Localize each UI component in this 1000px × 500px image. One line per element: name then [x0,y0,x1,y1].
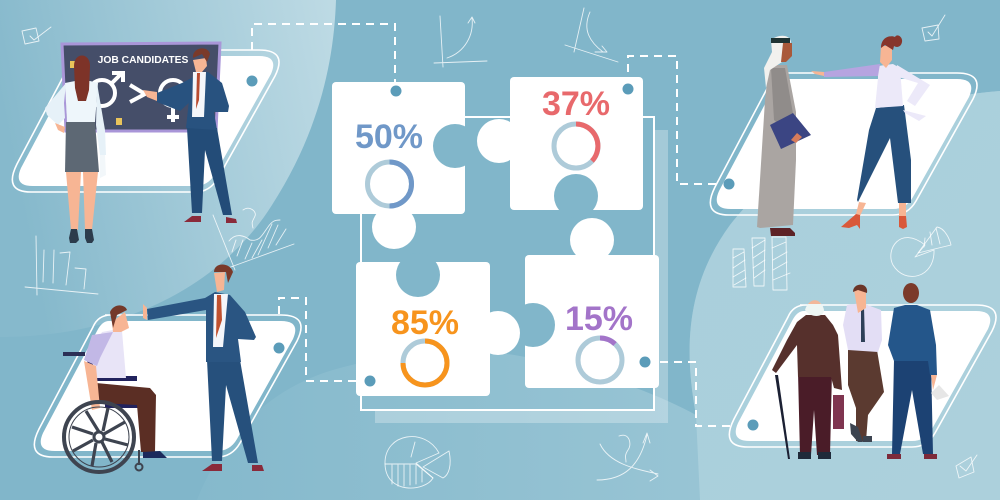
icon: area chart [213,208,294,270]
person: woman from behind [45,56,106,243]
icon: check bottom right [956,455,977,478]
hair [881,35,902,50]
icon: bar chart left [25,236,98,295]
dashed connectors [252,24,732,426]
donut [403,341,447,385]
icon: checkbox top left [22,27,51,44]
percentage: 85% [391,304,459,342]
percentage: 15% [565,300,633,338]
hair [193,48,210,62]
icon: decline curve [565,8,618,62]
hair [903,283,919,303]
panel: top right card [710,73,977,215]
person: presenter man [143,48,237,223]
icon: hatched bars [733,237,790,290]
icon: pie chart right [891,227,951,276]
person: man with raised hand [143,264,264,471]
chalkboard [62,43,220,131]
board title: JOB CANDIDATES [98,55,189,66]
puzzle piece: 15% [511,218,659,388]
donut [578,338,622,382]
panel: bottom left card [34,315,301,457]
puzzle piece: 50% [332,82,477,249]
hair [110,305,127,328]
panel: bottom right card [729,305,996,447]
wheel [64,402,142,472]
male symbol [89,73,123,106]
person: woman pointing [811,35,930,229]
hair [74,56,90,101]
percentage: 37% [542,85,610,123]
person: man in thobe [757,36,811,236]
panel: top left card [12,50,279,192]
person: elderly man with cane [772,300,844,459]
icon: growth curve [434,16,487,67]
hair [214,264,233,283]
sticky notes [70,61,122,125]
folder [770,113,811,149]
person: man in wheelchair [63,305,167,472]
puzzle piece: 85% [356,253,520,396]
headdress [764,36,791,88]
person: man in blue suit from behind [887,283,949,459]
hair [805,301,824,316]
percentage: 50% [355,118,423,156]
puzzle piece: 37% [477,77,643,218]
puzzle frame [361,117,668,423]
greater than sign [130,85,145,102]
icon: check top right [922,15,945,41]
female symbol [160,80,186,122]
icon: pie chart bottom [385,437,450,488]
donut [368,162,412,206]
hair [853,285,867,293]
person: thinking man [843,285,884,442]
donut [554,124,598,168]
icon: question arrows [597,433,658,481]
